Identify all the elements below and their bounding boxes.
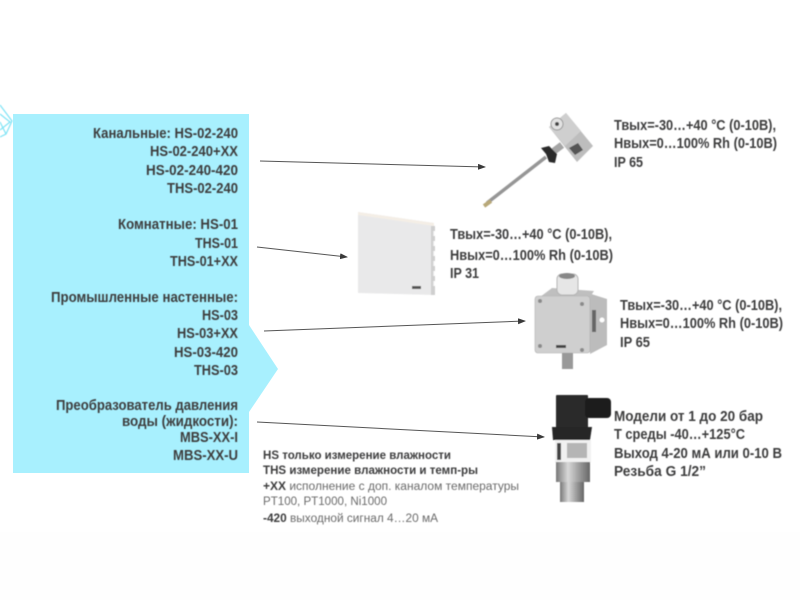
arrow: duct sensors to duct device [260,161,485,167]
spec text: duct sensor: IP 65 [614,155,643,171]
room sensors list: Комнатные: HS-01 [118,217,238,233]
panel background arrow [13,114,278,473]
industrial wall sensors list: HS-03 [202,308,238,324]
pressure transducer list: Преобразователь давления [56,398,238,414]
duct sensors list: THS-02-240 [167,181,238,197]
legend text block: HS только измерение влажности [263,450,451,462]
industrial wall sensors list: HS-03-420 [174,345,238,361]
spec text: duct sensor [614,118,777,171]
spec text: pressure transducer [614,409,782,480]
legend text block [263,450,519,525]
spec text: wall sensor: IP 65 [620,335,650,351]
room sensors list: THS-01 [195,236,238,252]
icon: pressure transducer [552,395,611,502]
spec text: room sensor: Твых=-30…+40 °C (0-10В), [450,227,612,243]
arrow: industrial sensors to wall device [264,321,525,331]
icon: room sensor [358,212,435,295]
spec text: pressure transducer: Т среды -40…+125°C [614,427,745,443]
icon: industrial wall sensor [535,273,607,369]
spec text: pressure transducer: Резьба G 1/2” [614,464,706,480]
pressure transducer list: MBS-XX-I [180,430,238,446]
spec text: pressure transducer: Модели от 1 до 20 бар [614,409,763,425]
duct sensors list [93,126,238,197]
industrial wall sensors list: Промышленные настенные: [51,290,238,306]
faint footer divider [0,532,800,600]
legend text block: +XX исполнение с доп. каналом температуры [263,481,519,493]
pressure transducer list [56,398,238,464]
panel: sensor list [13,114,278,473]
spec text: wall sensor: Нвых=0…100% Rh (0-10В) [620,316,783,332]
spec text: duct sensor: Твых=-30…+40 °C (0-10В), [614,118,776,134]
room sensors list: THS-01+XX [170,254,238,270]
spec text: room sensor: Нвых=0…100% Rh (0-10В) [450,248,613,264]
pressure transducer list: воды (жидкости): [122,414,238,430]
spec text: room sensor [450,227,613,282]
industrial wall sensors list: HS-03+XX [177,326,238,342]
duct sensors list: HS-02-240-420 [146,163,238,179]
room sensors list [118,217,238,270]
arrow: room sensors to room device [257,247,347,257]
spec text: room sensor: IP 31 [450,266,479,282]
spec text: pressure transducer: Выход 4-20 мА или 0-10 В [614,446,782,462]
legend text block: PT100, PT1000, Ni1000 [263,496,387,508]
icon: duct sensor [484,113,593,206]
spec text: wall sensor: Твых=-30…+40 °C (0-10В), [620,298,782,314]
decorative crystal icon [0,105,12,137]
duct sensors list: HS-02-240+XX [150,144,238,160]
duct sensors list: Канальные: HS-02-240 [93,126,238,142]
pressure transducer list: MBS-XX-U [173,448,238,464]
industrial wall sensors list [51,290,238,379]
spec text: wall sensor [620,298,783,351]
arrow: pressure list to transducer [257,422,544,437]
legend text block: THS измерение влажности и темп-ры [263,465,478,477]
spec text: duct sensor: Нвых=0…100% Rh (0-10В) [614,136,777,152]
industrial wall sensors list: THS-03 [194,363,238,379]
legend text block: -420 выходной сигнал 4…20 мА [263,513,438,525]
